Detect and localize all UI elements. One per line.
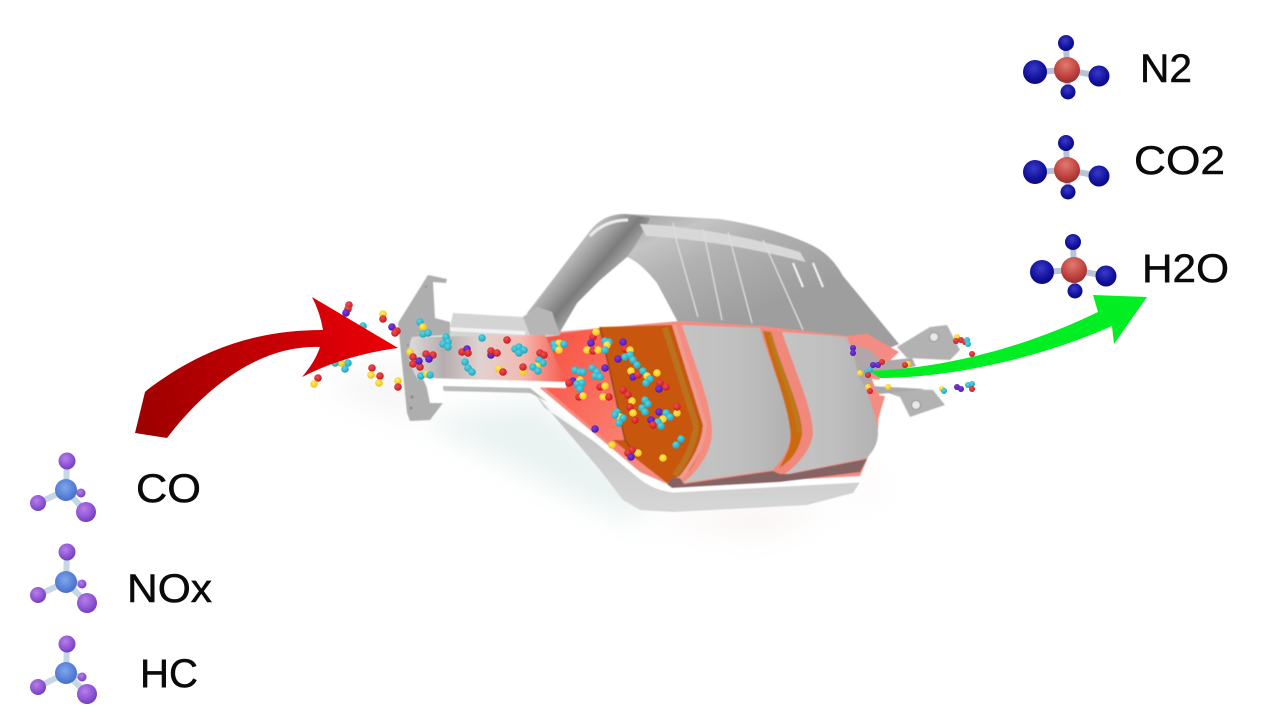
label: CO: CO bbox=[136, 467, 201, 511]
lower shell bbox=[532, 390, 860, 512]
label: N2: N2 bbox=[1140, 47, 1192, 91]
right mounting brackets bbox=[873, 325, 960, 417]
molecule: CO2 bbox=[1023, 135, 1110, 200]
molecule: H2O bbox=[1030, 234, 1116, 298]
inlet flange bbox=[398, 275, 566, 421]
label: HC: HC bbox=[140, 652, 198, 696]
orange catalyst front bbox=[600, 325, 705, 483]
base strip and bumps bbox=[667, 459, 867, 488]
label: H2O: H2O bbox=[1142, 247, 1229, 291]
cross-section outline bbox=[540, 321, 899, 486]
molecule: N2 bbox=[1023, 35, 1110, 100]
molecule: HC bbox=[30, 636, 97, 704]
upper shell bbox=[527, 214, 899, 352]
label: NOx: NOx bbox=[127, 567, 212, 611]
molecule: NOx bbox=[30, 544, 97, 613]
molecule: CO bbox=[30, 452, 96, 522]
gas particles inside converter bbox=[406, 318, 685, 462]
arrow: green clean outflow bbox=[870, 295, 1147, 378]
gas particles leaving converter bbox=[850, 334, 975, 394]
catalytic converter body bbox=[398, 214, 960, 512]
shadow under converter bbox=[320, 360, 880, 535]
outlet cone bbox=[847, 335, 925, 420]
red inlet cone bbox=[543, 328, 640, 470]
arrow: red exhaust inflow bbox=[135, 297, 398, 438]
gas particles entering converter bbox=[310, 301, 402, 391]
orange catalyst band bbox=[760, 328, 813, 475]
label: CO2: CO2 bbox=[1134, 139, 1225, 183]
lower shell white rim bbox=[537, 391, 860, 490]
grey catalyst brick one bbox=[682, 325, 790, 483]
inlet pipe bbox=[409, 307, 566, 402]
grey catalyst brick two bbox=[782, 332, 878, 475]
